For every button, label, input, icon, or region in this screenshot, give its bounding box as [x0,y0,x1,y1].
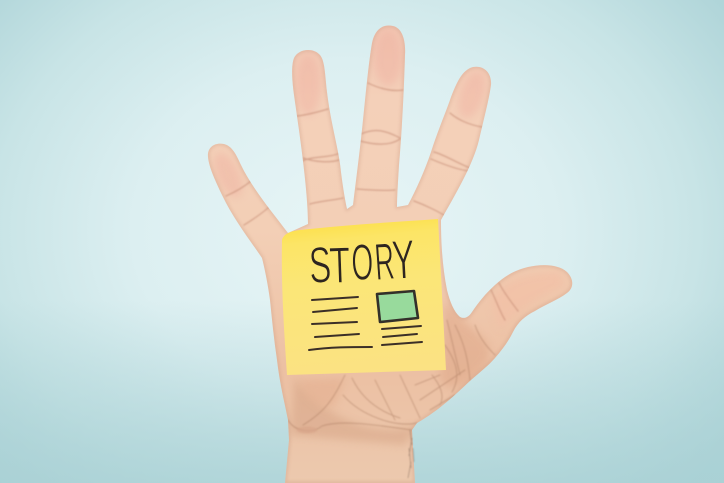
wrist crease [298,427,313,433]
note paper [282,219,446,375]
text lines left [309,297,372,350]
title: T [328,238,351,295]
fingertip tint [208,30,491,201]
title: S [308,237,333,295]
hand [208,26,572,483]
skin shading and creases [208,26,572,483]
arm hair [408,430,414,478]
sticky note [282,219,446,375]
title: O [350,233,374,291]
edge shading [208,26,572,483]
finger creases [226,83,518,320]
palm shadow [290,384,412,446]
picture box [377,291,418,322]
palm lines [288,320,495,431]
lower background shading [0,300,724,483]
box outline [377,291,418,322]
hand silhouette [208,26,572,483]
title [308,229,416,295]
green fill [378,292,417,321]
thumb tint [490,272,566,330]
text lines right [382,326,422,345]
title: Y [390,229,416,291]
title: R [373,231,396,291]
